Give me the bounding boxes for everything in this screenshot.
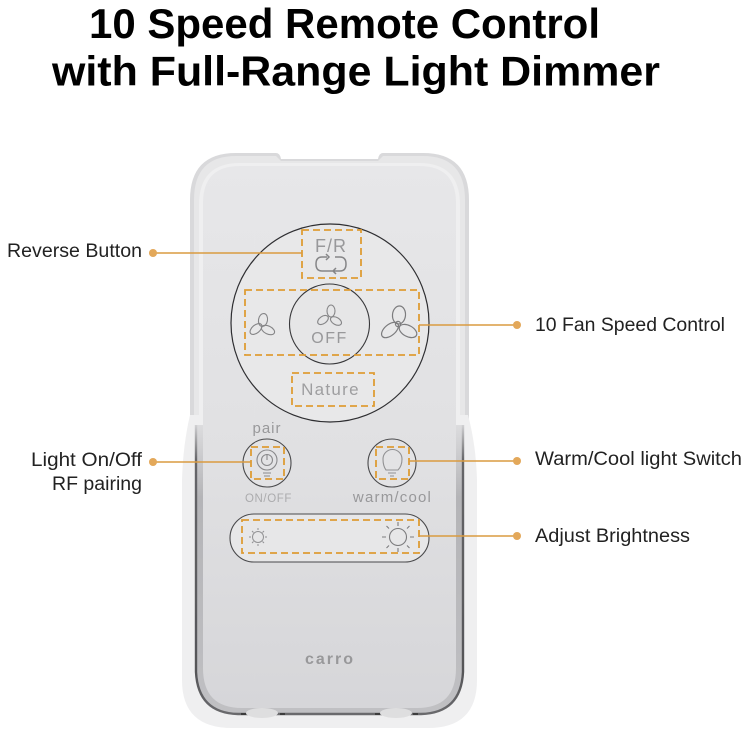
remote upper shell (190, 153, 469, 470)
callout: fan speed (419, 315, 725, 336)
brightness pill (230, 514, 429, 562)
remote face (203, 166, 456, 708)
warm/cool button (368, 439, 416, 487)
holder base (182, 415, 477, 728)
brand logo: carro (305, 651, 353, 668)
callout: light on/off (31, 450, 251, 495)
title: with Full-Range Light Dimmer (51, 48, 660, 94)
icon: bright sun (382, 522, 414, 552)
icon: dim sun (249, 528, 267, 546)
callout: fan speed: 10 Fan Speed Control (535, 315, 725, 336)
on/off button (243, 439, 291, 487)
icon: light bulb (383, 450, 402, 476)
callout: light on/off: RF pairing (52, 474, 142, 495)
bottom clips (246, 708, 412, 718)
off button: OFF (311, 330, 348, 347)
dashed highlight boxes (242, 230, 419, 553)
callout: warm/cool (409, 449, 742, 470)
callout: reverse button (7, 241, 302, 262)
callout: light on/off: Light On/Off (31, 450, 143, 471)
F/R button (315, 236, 347, 274)
icon: reverse arrows (316, 254, 346, 274)
off button (290, 284, 370, 364)
callout: brightness: Adjust Brightness (535, 526, 690, 547)
remote control (182, 153, 477, 728)
clip ticks (241, 713, 418, 715)
warm/cool label: warm/cool (352, 489, 432, 506)
main wheel (231, 224, 429, 422)
inner recess (196, 425, 463, 714)
F/R button: F/R (315, 236, 347, 256)
Nature label: Nature (301, 380, 360, 399)
icon: fan low (248, 313, 276, 337)
ON/OFF label: ON/OFF (245, 493, 292, 505)
icon: fan high (379, 305, 419, 341)
title: 10 Speed Remote Control (89, 0, 600, 47)
title (51, 0, 660, 94)
pair label: pair (252, 420, 282, 437)
callout: warm/cool: Warm/Cool light Switch (535, 449, 742, 470)
callout: brightness (419, 526, 690, 547)
callout: reverse button: Reverse Button (7, 241, 142, 262)
icon: power bulb (257, 450, 277, 476)
icon: fan small centre (316, 305, 343, 327)
